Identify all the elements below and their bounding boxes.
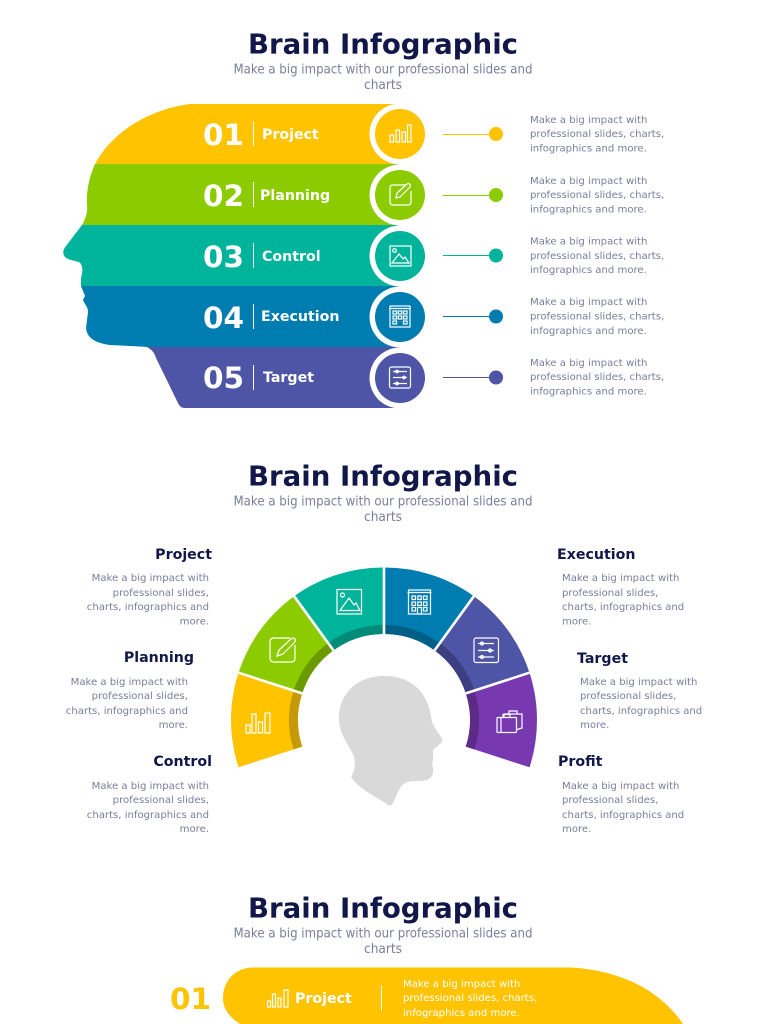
connector 05 <box>443 370 503 384</box>
description 03 <box>530 236 664 276</box>
band 01 project: 01 <box>203 118 244 152</box>
section heading 3: charts <box>364 942 402 957</box>
description 01: infographics and more. <box>530 144 647 154</box>
label: planning: charts, infographics and <box>66 706 188 717</box>
segment separators <box>238 567 530 693</box>
description 05 <box>530 358 664 398</box>
label: target: professional slides, <box>580 691 676 702</box>
segment: green <box>238 596 333 693</box>
label: control: charts, infographics and <box>87 810 209 821</box>
band 05 target: 05 <box>203 361 244 395</box>
section heading 2: Make a big impact with our professional slides and <box>234 494 532 510</box>
description 04: professional slides, charts, <box>530 312 664 322</box>
band 05 target: Target <box>263 370 314 386</box>
band 03 control: 03 <box>203 240 244 274</box>
band 03 control <box>63 225 400 286</box>
label: control: professional slides, <box>113 795 209 806</box>
label: project: charts, infographics and <box>87 602 209 613</box>
pill description: Make a big impact with <box>403 979 520 990</box>
label: control <box>87 754 212 835</box>
label: profit: Profit <box>558 754 603 770</box>
band 02 planning: Planning <box>260 188 330 204</box>
icon circle 01: bars <box>370 104 430 164</box>
section heading 3 <box>234 892 532 957</box>
panel: head silhouette steps <box>63 104 430 408</box>
pill description: professional slides, charts, <box>403 993 537 1004</box>
description 04: Make a big impact with <box>530 297 647 308</box>
description 05: professional slides, charts, <box>530 372 664 383</box>
panel: project pill <box>223 968 683 1024</box>
label: project: professional slides, <box>113 588 209 599</box>
label: planning: Planning <box>124 650 194 666</box>
section heading 1 <box>234 28 532 93</box>
description 01: Make a big impact with <box>530 115 647 126</box>
section heading 1: charts <box>364 78 402 93</box>
section heading 2 <box>234 460 532 525</box>
label: project: Make a big impact with <box>92 573 209 584</box>
icon circle 05: sliders <box>370 348 430 408</box>
section heading 3: Brain Infographic <box>248 892 518 924</box>
description 03: professional slides, charts, <box>530 251 664 262</box>
label: target: charts, infographics and <box>580 706 702 717</box>
segment: yellow <box>231 673 302 767</box>
band 04 execution <box>81 286 400 347</box>
label: execution: Execution <box>557 547 635 563</box>
label: profit: more. <box>562 824 591 835</box>
band 05 target <box>147 347 400 408</box>
label: execution: Make a big impact with <box>562 573 679 584</box>
section heading 2: Brain Infographic <box>248 460 518 492</box>
description 05: Make a big impact with <box>530 358 647 369</box>
description 02 <box>530 176 664 216</box>
connector 04 <box>443 310 503 324</box>
segment: blue <box>384 567 474 650</box>
icon circle 04: building <box>370 286 430 348</box>
label: planning: more. <box>159 720 188 731</box>
panel: project pill: Project <box>295 991 352 1007</box>
section heading 1: Brain Infographic <box>248 28 518 60</box>
icon: bars <box>268 990 288 1007</box>
band 01 project: Project <box>262 127 319 143</box>
label: control: Make a big impact with <box>92 781 209 792</box>
label: target: Target <box>577 651 628 667</box>
band 02 planning: 02 <box>203 179 244 213</box>
description 02: Make a big impact with <box>530 176 647 187</box>
segment: indigo <box>435 596 530 693</box>
section heading 1: Make a big impact with our professional slides and <box>234 62 532 78</box>
section heading 3: Make a big impact with our professional slides and <box>234 926 532 942</box>
band 03 control: Control <box>262 249 321 265</box>
label: project <box>87 547 212 628</box>
description 04: infographics and more. <box>530 326 647 337</box>
label: execution: charts, infographics and <box>562 602 684 613</box>
connector 01 <box>443 127 503 141</box>
label: planning: Make a big impact with <box>71 677 188 688</box>
band 02 planning <box>82 164 400 225</box>
description 03: infographics and more. <box>530 265 647 276</box>
label: execution: professional slides, <box>562 588 658 599</box>
description 03: Make a big impact with <box>530 236 647 248</box>
label: planning <box>66 650 194 731</box>
pill description <box>403 979 537 1019</box>
number 01: 01 <box>170 982 211 1016</box>
pill description: infographics and more. <box>403 1008 520 1019</box>
icon circle 02: pencil <box>370 164 430 226</box>
label: execution <box>557 547 684 628</box>
icon: grey head <box>339 676 442 806</box>
label: execution: more. <box>562 616 591 628</box>
label: target: more. <box>580 720 609 731</box>
band 04 execution: Execution <box>261 309 339 325</box>
band 01 project <box>95 104 400 164</box>
description 05: infographics and more. <box>530 386 647 398</box>
band 04 execution: 04 <box>203 301 244 335</box>
description 02: professional slides, charts, <box>530 190 664 201</box>
segment: violet <box>466 673 537 767</box>
label: project: more. <box>180 616 209 628</box>
label: control: more. <box>180 824 209 835</box>
label: target <box>577 651 702 731</box>
label: planning: professional slides, <box>92 691 188 702</box>
segment: teal <box>294 567 384 650</box>
label: profit: Make a big impact with <box>562 781 679 792</box>
label: project: Project <box>155 547 212 563</box>
description 04 <box>530 297 664 337</box>
connector 03 <box>443 248 503 262</box>
label: control: Control <box>153 754 212 770</box>
chart: semicircle segments <box>231 567 537 767</box>
description 02: infographics and more. <box>530 204 647 216</box>
connector 02 <box>443 188 503 202</box>
label: profit: professional slides, <box>562 795 658 806</box>
section heading 2: charts <box>364 510 402 525</box>
label: target: Make a big impact with <box>580 677 697 688</box>
label: profit <box>558 754 684 835</box>
label: profit: charts, infographics and <box>562 810 684 821</box>
description 01 <box>530 115 664 154</box>
icon circle 03: picture <box>370 226 430 286</box>
description 01: professional slides, charts, <box>530 129 664 140</box>
